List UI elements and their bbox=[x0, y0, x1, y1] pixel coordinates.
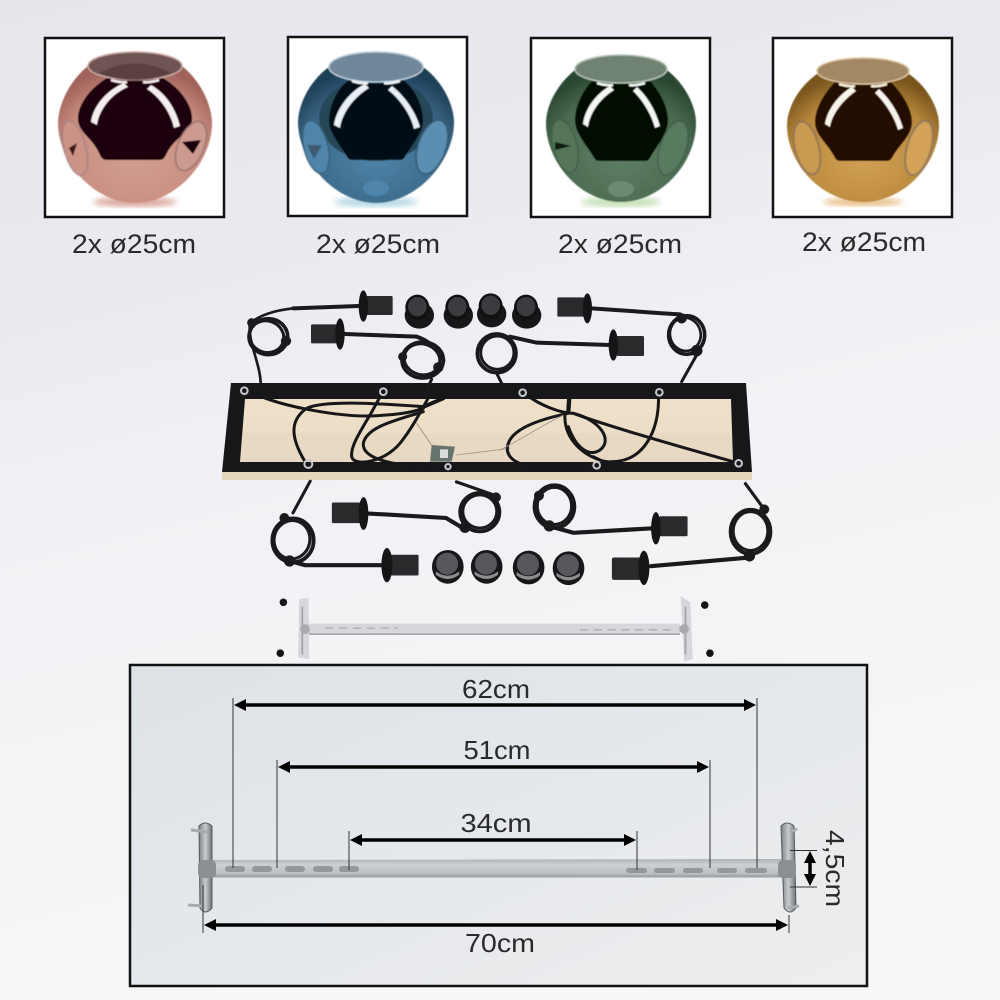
glass rings lower row bbox=[432, 550, 584, 585]
icon: blue glass globe bbox=[298, 52, 454, 207]
caption: 2x ø25cm bbox=[316, 229, 440, 259]
lamp holder 2 bbox=[332, 482, 501, 533]
panel: gold globe bbox=[773, 38, 952, 257]
dimension: 70cm bbox=[203, 885, 789, 958]
lamp holder with coil B bbox=[311, 318, 443, 397]
dimension: 62cm: 62cm bbox=[462, 674, 530, 704]
small mounting bracket bbox=[298, 596, 693, 661]
lamp holder 1 bbox=[270, 481, 419, 582]
lamp holder 3 bbox=[534, 485, 688, 544]
lamp holder with coil A bbox=[245, 290, 393, 383]
panel: blue globe bbox=[288, 37, 467, 259]
panel: bracket dimensions bbox=[130, 665, 867, 986]
dimension: 51cm bbox=[277, 735, 710, 868]
dimension: 70cm: 70cm bbox=[465, 928, 535, 958]
lamp holder with coil D bbox=[557, 293, 705, 382]
icon: green glass globe bbox=[546, 55, 696, 207]
dimension: 34cm: 34cm bbox=[460, 808, 532, 838]
lamp holder with coil C bbox=[477, 329, 644, 393]
dimension: 34cm bbox=[349, 808, 637, 870]
clips bbox=[241, 387, 451, 469]
dimension: 62cm bbox=[233, 674, 757, 868]
caption: 2x ø25cm bbox=[558, 229, 682, 259]
caption: 2x ø25cm bbox=[802, 227, 926, 257]
caption: 2x ø25cm bbox=[72, 229, 196, 259]
dimension: 4,5cm: 4,5cm bbox=[820, 830, 850, 907]
icon: rose glass globe bbox=[58, 52, 213, 207]
glass rings top row bbox=[405, 293, 506, 329]
panel: green globe bbox=[531, 38, 710, 259]
icon: gold glass globe bbox=[787, 58, 939, 206]
lower lamp holders, glass rings and mounting bracket bbox=[270, 481, 770, 661]
lamp holder 4 bbox=[612, 484, 770, 585]
lamp holders and cable coils above plate, left bbox=[245, 290, 506, 397]
wooden ceiling plate with black frame bbox=[222, 383, 752, 480]
panel: rose globe bbox=[45, 38, 224, 259]
mounting bracket bbox=[188, 823, 799, 912]
internal cables, left half bbox=[241, 387, 510, 469]
dimension: 4,5cm bbox=[790, 830, 850, 907]
dimension: 51cm: 51cm bbox=[464, 735, 530, 765]
screws bbox=[276, 598, 714, 657]
glass ring bbox=[512, 295, 541, 329]
internal cables, right half bbox=[500, 387, 742, 469]
electronic driver board bbox=[430, 445, 455, 462]
lamp holders and cable coils above plate, right bbox=[477, 293, 705, 393]
